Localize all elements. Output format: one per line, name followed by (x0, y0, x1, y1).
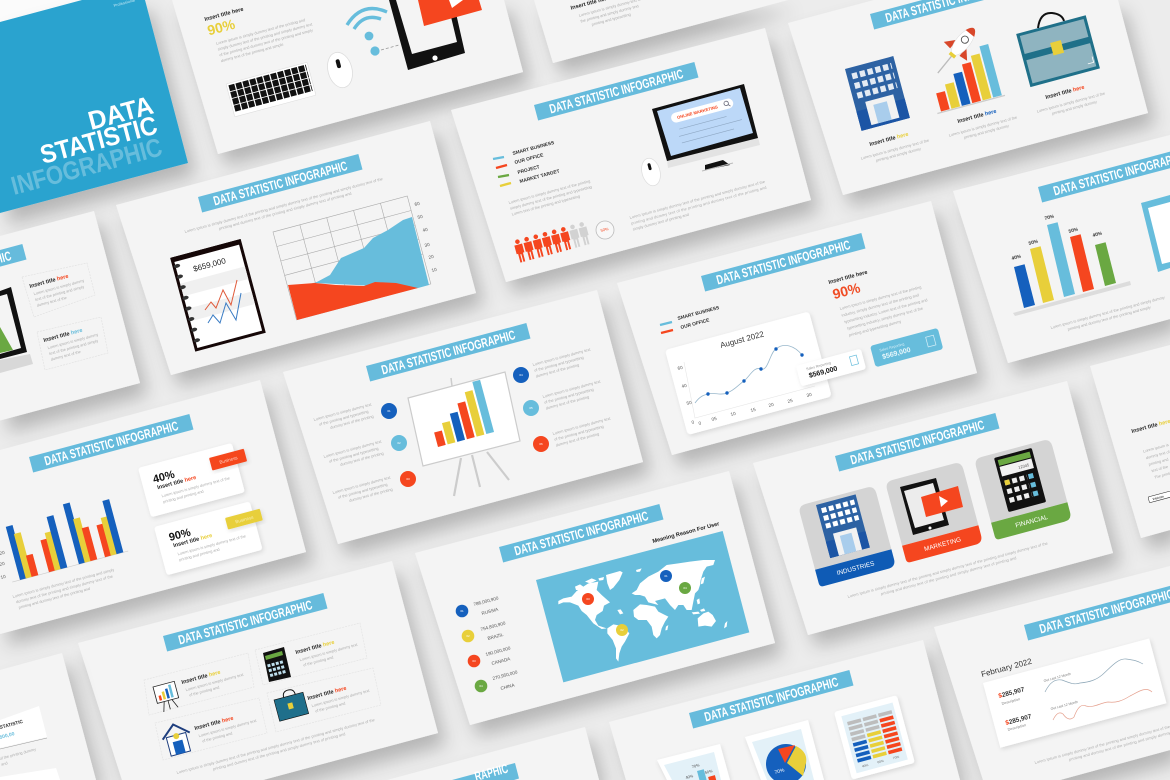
card: marketing: MARKETING (923, 536, 962, 553)
chart axis labels: 05 (711, 416, 718, 422)
text block: Insert title here (828, 270, 868, 286)
card: blue: Insert title here (43, 328, 83, 344)
text block (828, 257, 932, 339)
card: house: Lorem ipsum is simply dummy text (198, 718, 258, 738)
country list: CHINA (500, 682, 516, 691)
legend: OUR OFFICE (514, 152, 545, 166)
numbered points: 04 (519, 373, 523, 377)
card: calculator: Insert title here (295, 640, 335, 656)
card: house: of the printing and (201, 731, 233, 743)
card: industries: INDUSTRIES (836, 560, 875, 577)
line chart card (665, 311, 832, 435)
stat card: blue (870, 328, 943, 367)
chart axis labels: 15 (750, 407, 757, 413)
cover heading: DATA (85, 90, 157, 136)
text block: Lorem text of the printing and typesetting (511, 193, 580, 217)
title bar (870, 0, 1034, 29)
text block: printing and dummy text of the printing and dummy text of the printing and (631, 185, 767, 226)
panel: right partial slide (1090, 345, 1170, 538)
card: financial: FINANCIAL (1015, 514, 1049, 529)
card: 90 percent: 90% (168, 527, 192, 544)
card: red: Lorem ipsum is simply dummy (33, 278, 85, 296)
chart axis labels: 30 (806, 392, 813, 398)
panel: grouped bars slide (0, 380, 306, 634)
card: briefcase: Insert title here (307, 686, 347, 702)
caption: chart: Lorem ipsum is simply dummy text of the (948, 115, 1018, 138)
text block: 90% (831, 279, 862, 302)
card: briefcase: of the printing and (314, 701, 346, 713)
stat card: white: $569,000 (808, 365, 838, 380)
icon: tablet frame (1141, 195, 1170, 272)
bar value labels: 50% (1028, 238, 1040, 247)
text blocks: Lorem ipsum is simply dummy text (532, 346, 592, 367)
tag: business: Business (219, 455, 239, 465)
stats card: $285,907 (998, 686, 1026, 700)
icon: tablet (0, 287, 33, 373)
button (1148, 490, 1170, 503)
caption: briefcase: Insert title here (1045, 85, 1085, 101)
caption: building: Insert title here (869, 132, 909, 148)
text block: printing and dummy text of the printing and simply dummy (1068, 730, 1170, 762)
cover heading: STATISTIC (37, 110, 161, 170)
panel: five bars slide (953, 135, 1170, 363)
title bar (0, 244, 26, 302)
numbered points: 01 (387, 409, 391, 413)
card: briefcase (267, 668, 381, 732)
chart axis labels: 50 (417, 214, 424, 220)
card: small bars: 40% (685, 774, 694, 780)
panel: August line chart slide (617, 201, 977, 455)
icon: building (816, 494, 870, 558)
chart axis labels (677, 365, 813, 426)
panel: four icon cards slide (78, 561, 438, 780)
legend: PROJECT (517, 164, 540, 176)
caption: building: printing and simply dummy (875, 146, 921, 163)
text block: of the printing dummy (0, 746, 36, 761)
text block: printing and dummy text of the printing and simply dummy text of printing and (212, 731, 346, 771)
title bar: DATA STATISTIC INFOGRAPHIC (177, 597, 314, 647)
text block: simply dummy text of the printing and typesetting (510, 184, 592, 211)
icon: notebook (171, 239, 265, 350)
stats card: $285,907 (1005, 713, 1033, 727)
area chart (273, 196, 438, 320)
card: 90 percent: printing and printing and (179, 547, 220, 562)
text block: Lorem ipsum is simply dummy text of the printing and simply dummy text of the printing and simply dummy text of the (847, 541, 1048, 599)
card: blue: text of the printing and simply (49, 338, 99, 356)
text blocks (313, 346, 615, 507)
caption: briefcase: Lorem ipsum is simply dummy text of the (1036, 91, 1106, 114)
card: 40 percent: printing and printing and (163, 489, 204, 504)
card: house (155, 698, 267, 760)
text block: typesetting industry, simply dummy text of the (846, 306, 923, 331)
text block: Lorem ipsum is simply dummy text of the printing and simply dummy text of the printing and simply dummy text of the (176, 717, 375, 775)
card: easel: Insert title here (181, 670, 221, 686)
panel: bottom partial slide (387, 727, 599, 780)
title bar: DATA STATISTIC INFOGRAPHIC (513, 508, 650, 558)
card: 90 percent: Lorem ipsum is simply dummy text of the (177, 533, 246, 556)
text blocks: dummy text of the printing (535, 362, 580, 379)
title bar (198, 154, 362, 212)
date heading: February 2022 (980, 657, 1033, 679)
country list: 03 (472, 659, 476, 663)
card: 40 percent: Insert title here (157, 475, 197, 491)
card: stacked rows: 60% (877, 759, 884, 764)
country list: CANADA (491, 656, 512, 666)
stats card: Out Last 12 Month (1043, 672, 1071, 683)
line chart card: August 2022 (719, 329, 765, 350)
cover heading (8, 90, 165, 201)
icon: briefcase (1018, 13, 1098, 85)
text block: Lorem ipsum is simply dummy text of the printing and simply (12, 567, 115, 599)
text block: of the printing and dummy text of the printing and simply (219, 28, 313, 57)
card: financial (974, 439, 1072, 540)
text block: printing and typesetting dummy (848, 319, 902, 338)
stat card: white (796, 349, 866, 386)
country list: 190,000,000 (485, 645, 511, 657)
panel: area chart slide (116, 121, 476, 375)
card: 90 percent: Insert title here (173, 533, 213, 549)
text blocks: of the printing and typesetting (337, 482, 388, 500)
text block (1131, 419, 1170, 482)
icon: tablet video (900, 478, 963, 535)
chart axis labels: 40 (422, 227, 429, 233)
map markers: 03 (586, 597, 590, 601)
text block: Lorem ipsum is simply dummy text of the printing and simply dummy text of the printing and simply dummy text of the (184, 176, 383, 234)
icon: wifi (347, 9, 399, 56)
country list: 04 (479, 684, 483, 688)
text blocks: of the printing and typesetting (318, 409, 369, 427)
country list: 270,950,000 (492, 669, 518, 681)
text block: printing and (1148, 457, 1169, 467)
panel: top centre slide (534, 0, 788, 63)
title bar (689, 670, 853, 728)
chart axis labels (414, 201, 438, 273)
legend: OUR OFFICE (680, 317, 711, 331)
chart axis labels: 0 (698, 420, 702, 426)
cover heading: INFOGRAPHIC (8, 132, 165, 201)
numbered points: 05 (529, 406, 533, 410)
chart axis labels: 0 (691, 419, 695, 425)
chart axis labels: 20 (768, 402, 775, 408)
text block: printing and dummy text of the printing and simply dummy text of printing and (218, 191, 352, 231)
card: 90 percent (154, 501, 263, 575)
chart axis labels: 10 (730, 411, 737, 417)
bar chart (1011, 213, 1131, 316)
caption: briefcase: printing and simply dummy (1051, 99, 1097, 116)
text blocks: dummy text of the printing (555, 431, 600, 448)
caption: chart: Insert title here (957, 109, 997, 125)
text blocks: Lorem ipsum is simply dummy text (313, 401, 373, 422)
icon: keyboard (226, 62, 316, 117)
chart axis labels: 60 (414, 201, 421, 207)
text block: dummy text of the printing and simply dummy text of the (15, 574, 113, 604)
people pictogram (513, 221, 591, 263)
caption: chart (945, 104, 1019, 143)
numbered points (381, 367, 549, 487)
card: blue: Lorem ipsum is simply dummy (47, 332, 99, 350)
title bar: DATA STATISTIC INFOGRAPHIC (548, 66, 685, 116)
chart axis labels: 40 (681, 383, 688, 389)
title bar (366, 323, 530, 381)
panel: presentation board slide (283, 290, 643, 544)
country list: RUSSIA (481, 606, 500, 616)
text blocks: dummy text of the printing (330, 414, 374, 430)
country list: 786,000,900 (473, 595, 499, 607)
text blocks: dummy text of the printing (349, 487, 393, 503)
white card lower (0, 768, 60, 780)
card: red: Insert title here (29, 274, 69, 290)
stat card: blue: Sales Reporting (879, 342, 905, 353)
button: Website (1152, 494, 1165, 501)
text blocks: of the printing and typesetting (328, 446, 379, 464)
legend (660, 305, 721, 333)
map markers (582, 570, 691, 636)
card: red: dummy text of the (36, 295, 67, 308)
stat card: white: Sales Reporting (806, 361, 831, 371)
chart axis labels: 20 (428, 254, 435, 260)
icon: easel board (408, 372, 520, 496)
title bar (534, 62, 698, 120)
bar value labels: 50% (1068, 226, 1080, 235)
title bar: DATA STATISTIC INFOGRAPHIC (849, 417, 986, 467)
text block: Insert title here (204, 7, 244, 23)
icon: tablet with video (389, 0, 482, 70)
text block: printing and dummy text of the printing and simply dummy text of printing and (880, 555, 1017, 596)
card: easel: of the printing and (188, 685, 220, 697)
title bar: DATA STATISTIC INFOGRAPHIC (380, 327, 517, 377)
text block: 90% (206, 16, 237, 38)
panel: online marketing slide (451, 28, 811, 282)
map heading: Meaning Reason For User (652, 521, 721, 545)
text blocks: of the printing and typesetting (534, 355, 584, 373)
card: stacked rows: 70% (892, 755, 900, 760)
text blocks: Lorem ipsum is simply dummy text (323, 438, 383, 459)
text block: simply dummy text of printing and (632, 212, 689, 232)
caption: building (857, 127, 931, 166)
stat card: blue: $569,000 (882, 347, 912, 361)
card: small bars (657, 744, 730, 780)
icon: building (845, 56, 910, 131)
text block (570, 0, 714, 31)
bar value labels: 40% (1092, 230, 1104, 239)
text block: Lorem ipsum is (1142, 442, 1169, 454)
card: blue (37, 317, 108, 370)
text blocks: Lorem ipsum is simply dummy text (332, 474, 392, 495)
chart axis labels: 10 (0, 574, 7, 580)
caption: briefcase (1033, 80, 1107, 119)
card: pie chart: 70% (774, 767, 786, 776)
country list (456, 595, 518, 692)
icon: monitor: ONLINE MARKETING (677, 104, 718, 120)
map markers: 02 (620, 628, 624, 632)
numbered points: 06 (539, 442, 543, 446)
card: stacked rows (834, 695, 915, 780)
numbered points: 02 (397, 441, 401, 445)
chart axis labels: 60 (677, 365, 684, 371)
country list: 754,800,900 (480, 620, 506, 632)
card: pie chart (745, 720, 824, 780)
text block: typesetting industry. Lorem text of the printing and (844, 297, 928, 324)
card: small bars: 70% (692, 763, 701, 769)
bar value labels (1011, 213, 1104, 262)
text blocks: Lorem ipsum is simply dummy text (552, 415, 612, 436)
stats card: Description (1001, 697, 1021, 706)
icon: rocket (926, 19, 986, 83)
text block: simply dummy text of the printing and simply dummy text (217, 21, 314, 52)
title bar: DATA STATISTIC INFOGRAPHIC (703, 674, 840, 724)
percent circle (596, 221, 614, 239)
legend: SMART BUSINESS (512, 140, 556, 157)
text block: Lorem ipsum is simply dummy text of the printing (508, 178, 591, 205)
chart axis labels: 30 (424, 242, 431, 248)
text block: Lorem ipsum is simply dummy text of the printing and (216, 17, 306, 46)
country list: 01 (460, 609, 464, 613)
panel: left partial slide (0, 211, 140, 420)
numbered points: 03 (406, 477, 410, 481)
panel: February slide (934, 566, 1170, 780)
card: calculator (255, 623, 367, 685)
card: easel (144, 653, 254, 715)
card: blue: dummy text of the (50, 349, 81, 362)
text block: Lorem ipsum is simply dummy text of the printing and simply dummy text of the (1034, 724, 1170, 765)
card: red: text of the printing and simply (35, 284, 85, 302)
card: briefcase: Lorem ipsum is simply dummy text (311, 688, 371, 708)
bar value labels: 40% (1011, 253, 1023, 262)
grouped bar chart (0, 491, 128, 582)
card: 40 percent: Lorem ipsum is simply dummy text of the (161, 475, 230, 498)
panel: three charts slide (609, 640, 960, 780)
country list: 02 (466, 634, 470, 638)
title bar (499, 504, 663, 562)
card: house: Insert title here (194, 716, 234, 732)
title bar (163, 593, 327, 651)
text blocks: dummy text of the printing (340, 451, 384, 467)
map markers: 04 (683, 586, 687, 590)
card: stacked rows: 40% (862, 763, 869, 769)
title bar: DATA STATISTIC INFOGRAPHIC (212, 158, 349, 208)
text block (204, 0, 317, 64)
text block: Lorem ipsum is simply dummy text of the printing and simply dummy (1050, 295, 1165, 330)
stats card (983, 638, 1166, 748)
card: marketing (885, 462, 983, 563)
text blocks: Lorem ipsum is simply dummy text (542, 378, 602, 399)
icon: mouse (324, 50, 356, 90)
text block: dummy text of the printing and simple (220, 42, 284, 63)
text blocks: of the printing and typesetting (554, 424, 604, 442)
text block: printing and dummy text of the printing and (18, 586, 90, 610)
chart axis labels: 50 (686, 400, 693, 406)
map markers: 01 (664, 574, 668, 578)
white card (0, 706, 47, 749)
panel: world map slide (415, 471, 775, 725)
icon: rising bar chart (923, 43, 1005, 114)
title bar: DATA STATISTIC INFOGRAPHIC (715, 237, 852, 287)
card: 40 percent (138, 443, 247, 517)
icon: monitor (652, 84, 760, 171)
text block: text of the (1151, 464, 1169, 473)
tag: business yellow: Business (235, 515, 255, 524)
percent circle: 50% (600, 226, 609, 233)
stats card: Description (1007, 723, 1027, 732)
text block: the printing and simply dummy text (580, 3, 640, 24)
legend: MARKET TARGET (519, 168, 560, 185)
panel: bottom left partial slide (0, 653, 96, 780)
card: small bars: 50% (704, 769, 713, 775)
text blocks: dummy text of the printing (545, 394, 590, 411)
icon: calculator: 12345 (1018, 462, 1030, 470)
chart axis labels: 10 (431, 267, 438, 273)
world map (536, 531, 749, 682)
country list: BRAZIL (487, 632, 504, 641)
caption: chart: printing and simply dummy (963, 123, 1009, 140)
chart axis labels: 25 (787, 398, 794, 404)
title bar (29, 414, 193, 472)
text block: printing and dummy text of the printing and simply (1067, 305, 1151, 332)
card: easel: Lorem ipsum is simply dummy text (185, 672, 245, 692)
caption: building: Lorem ipsum is simply dummy text of the (860, 138, 930, 161)
text block: printing and typesetting (591, 12, 631, 27)
text block: Lorem ipsum is simply dummy text of the printing and simply dummy text of the (629, 179, 765, 220)
text block (508, 178, 594, 217)
panel: keyboard slide (172, 0, 523, 154)
text block (0, 746, 38, 767)
title bar (452, 761, 519, 780)
card: calculator: Lorem ipsum is simply dummy text (299, 642, 359, 662)
text block: industry, simply dummy text of the printing and (841, 292, 919, 318)
text block: and (1, 760, 8, 767)
legend: SMART BUSINESS (677, 305, 721, 322)
legend (493, 140, 560, 186)
title bar: DATA STATISTIC INFOGRAPHIC (43, 418, 180, 468)
card: industries (798, 486, 896, 587)
panel: building rocket briefcase slide (788, 0, 1148, 195)
bar value labels: 70% (1044, 213, 1056, 222)
text block: dummy text of (1145, 449, 1170, 460)
stats card: Out Last 12 Month (1050, 700, 1078, 711)
card: calculator: of the printing and (302, 655, 334, 667)
text blocks: of the printing and typesetting (544, 387, 594, 405)
icon: mouse (639, 156, 663, 188)
chart axis labels (0, 550, 7, 580)
panel: industries marketing financial slide (753, 381, 1113, 635)
icon: notebook: $659,000 (192, 256, 227, 274)
card: 40 percent: 40% (152, 469, 176, 486)
text block: Lorem ipsum is simply dummy text of the printing (839, 284, 922, 311)
title bar (701, 233, 865, 291)
panel: cover slide (0, 0, 188, 213)
card: red (22, 263, 95, 317)
title bar (835, 413, 999, 471)
